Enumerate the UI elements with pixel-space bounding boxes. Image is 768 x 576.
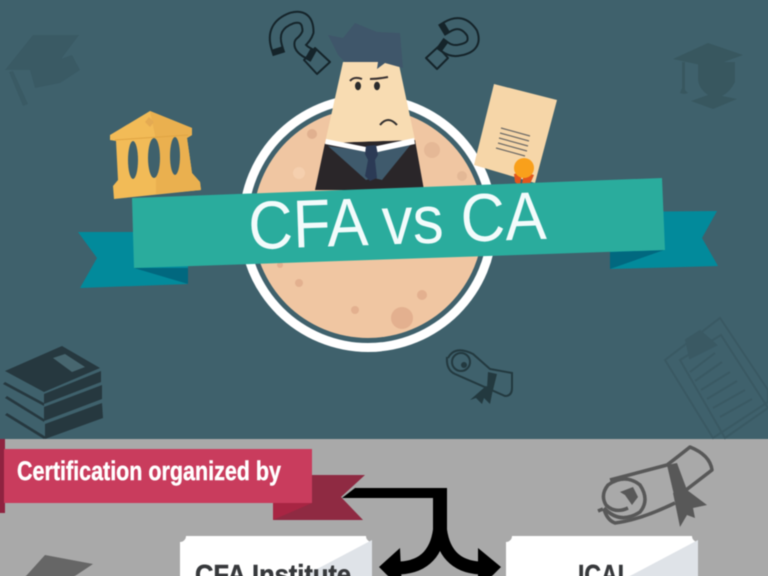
header background panel (0, 0, 768, 439)
icon: gray graduation cap bottom left (17, 555, 93, 576)
hair (328, 23, 403, 69)
section ribbon: certification organized by (0, 439, 365, 520)
card: ICAI (506, 536, 698, 576)
ribbon face (4, 449, 312, 503)
icon: large gray diploma (598, 447, 712, 527)
icon: small rolled diploma (447, 350, 512, 404)
face (325, 60, 415, 143)
frown (380, 120, 397, 125)
tie (365, 145, 378, 181)
ribbon tail: right (610, 211, 718, 269)
icon: faint clipboard (665, 318, 768, 438)
white collar (325, 138, 415, 152)
shirt lapels (328, 146, 372, 180)
character: worried man (315, 23, 424, 190)
eyes (355, 82, 361, 90)
arrow: split connector (342, 488, 501, 576)
title: CFA vs CA (247, 178, 548, 264)
lower section background panel (0, 439, 768, 576)
suit jacket (315, 140, 424, 190)
ribbon text: Certification organized by (17, 456, 281, 486)
title banner (132, 178, 665, 268)
icon: stack of books (3, 346, 103, 439)
card: CFA Institute (180, 536, 372, 576)
eyebrows (350, 77, 388, 81)
icon: institution building (110, 111, 201, 199)
badge: circle with white ring (239, 94, 497, 352)
ribbon left edge (0, 439, 5, 513)
ribbon tail: left (78, 232, 188, 288)
ribbon tail (273, 475, 365, 520)
icon: graduation cap top left (5, 35, 80, 106)
icon: certificate with seal (474, 84, 557, 188)
icon: right question mark (426, 24, 473, 69)
icon: graduate head with cap top right (673, 43, 743, 109)
icon: left question mark (275, 17, 330, 74)
